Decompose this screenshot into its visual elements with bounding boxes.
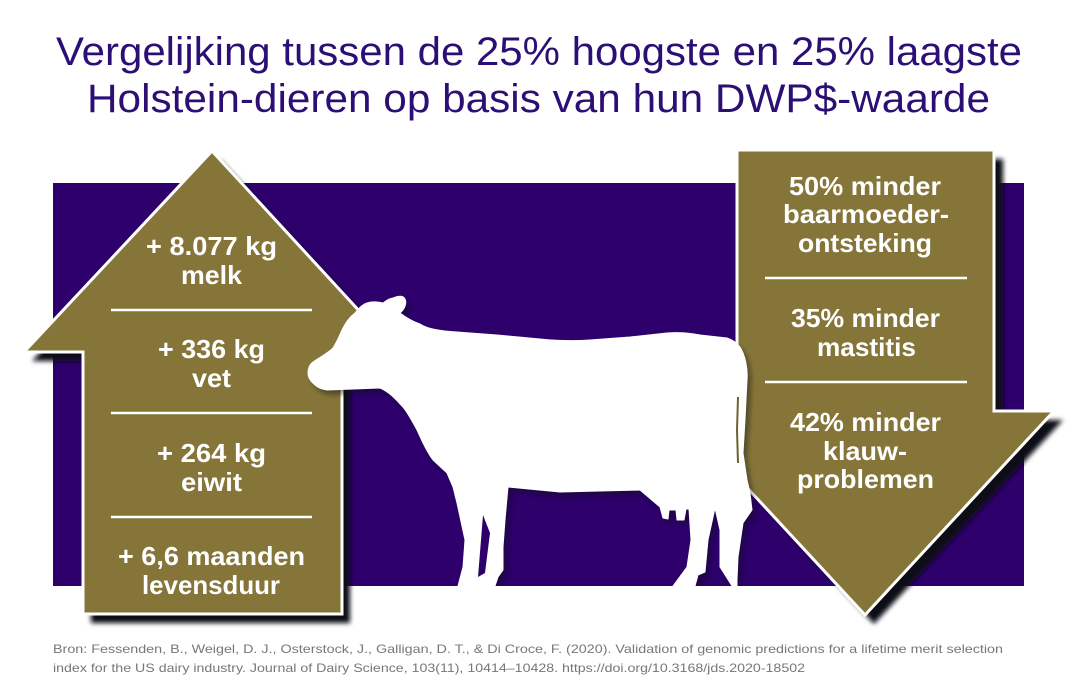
stat: milk: melk	[181, 260, 243, 290]
panel: purple background	[53, 183, 1024, 586]
up arrow with benefits	[24, 151, 405, 623]
stat: hoof problems: 42% minder	[790, 407, 941, 437]
stat: metritis: ontsteking	[798, 228, 932, 258]
stat: protein: + 264 kg	[157, 438, 266, 468]
stat: milk	[146, 231, 277, 290]
stat: lifespan: + 6,6 maanden	[118, 541, 305, 571]
title: Holstein-dieren op basis van hun DWP$-waarde	[87, 77, 990, 121]
source note: Bron: Fessenden, B., Weigel, D. J., Osterstock, J., Galligan, D. T., & Di Croce, F. (2020). Validation of genomic predictions for a lifetime merit selection	[53, 642, 1003, 656]
stat: lifespan: levensduur	[142, 570, 280, 600]
source note	[53, 642, 1003, 675]
stat: metritis: 50% minder	[789, 171, 941, 201]
title: Vergelijking tussen de 25% hoogste en 25% laagste	[56, 30, 1022, 74]
stat: mastitis: 35% minder	[791, 303, 940, 333]
title	[56, 30, 1022, 121]
source note: index for the US dairy industry. Journal of Dairy Science, 103(11), 10414–10428. https://doi.org/10.3168/jds.2020-18502	[53, 661, 805, 675]
stat: mastitis: mastitis	[817, 332, 916, 362]
stat: mastitis	[791, 303, 940, 362]
stat: metritis	[783, 171, 949, 258]
stat: fat: + 336 kg	[158, 334, 265, 364]
stat: milk: + 8.077 kg	[146, 231, 277, 261]
stat: protein	[157, 438, 266, 497]
stat: protein: eiwit	[181, 467, 242, 497]
stat: metritis: baarmoeder-	[783, 199, 949, 229]
stat: fat	[158, 334, 265, 393]
stat: hoof problems: problemen	[797, 464, 934, 494]
stat: hoof problems	[790, 407, 941, 494]
stat: fat: vet	[192, 363, 231, 393]
down arrow with reductions	[676, 150, 1063, 624]
icon: cow silhouette	[308, 296, 756, 591]
stat: hoof problems: klauw-	[823, 436, 907, 466]
stat: lifespan	[118, 541, 305, 600]
